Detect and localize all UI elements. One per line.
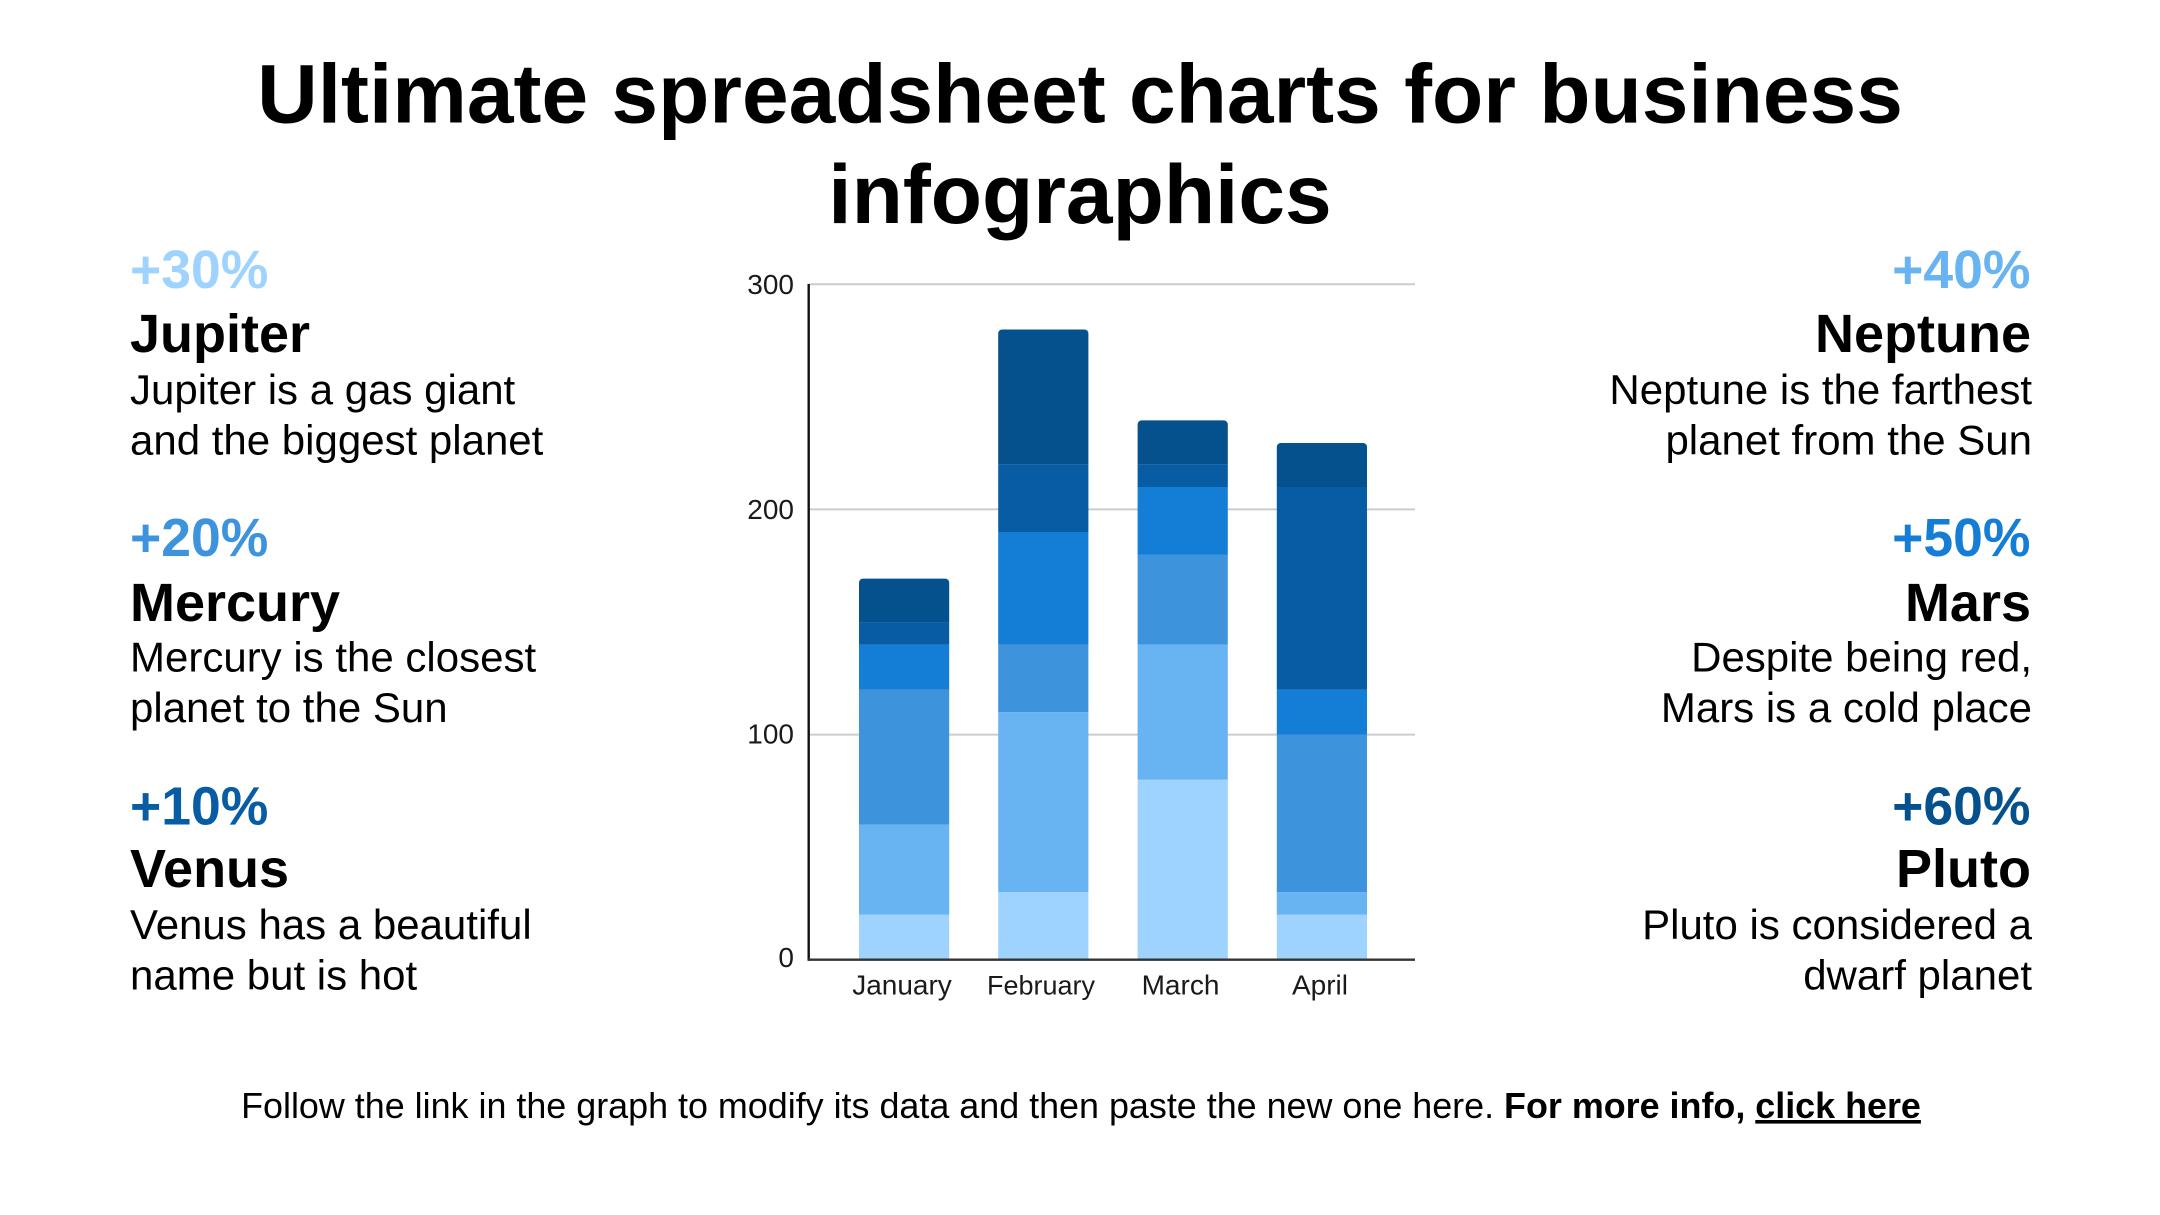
x axis labels: January <box>852 970 952 1001</box>
bar: April <box>1277 443 1367 960</box>
x axis labels: April <box>1292 970 1348 1001</box>
panel: Neptune <box>1609 241 2032 464</box>
y axis labels: 0 <box>778 942 794 973</box>
panel: Pluto: +60% <box>1892 778 2030 837</box>
panel: Jupiter: Jupiter <box>130 304 310 364</box>
panel: Mercury: Mercury <box>130 573 340 633</box>
title: infographics <box>828 147 1332 241</box>
panel: Mercury: Mercury is the closest <box>130 634 536 680</box>
x axis labels: March <box>1142 970 1219 1001</box>
panel: Venus <box>130 778 532 998</box>
panel: Mars: Mars <box>1905 573 2031 633</box>
y axis labels: 100 <box>747 718 794 750</box>
x axis labels <box>852 970 1348 1001</box>
y axis labels: 300 <box>747 269 794 300</box>
panel: Neptune: +40% <box>1892 241 2030 300</box>
bar: February <box>998 330 1088 960</box>
y axis labels: 200 <box>747 494 794 525</box>
bar: January <box>859 579 949 960</box>
panel: Mars: Despite being red, <box>1691 634 2032 680</box>
bar: March <box>1138 420 1228 960</box>
panel: Mercury <box>130 509 536 731</box>
panel: Venus: +10% <box>130 778 268 837</box>
panel: Mars: +50% <box>1892 509 2030 568</box>
panel: Pluto: Pluto is considered a <box>1642 901 2033 948</box>
panel: Neptune: Neptune <box>1815 304 2031 364</box>
panel: Pluto <box>1642 778 2033 998</box>
panel: Pluto: dwarf planet <box>1803 952 2032 998</box>
panel: Venus: Venus <box>130 839 289 899</box>
panel: Neptune: planet from the Sun <box>1665 416 2032 464</box>
panel: Neptune: Neptune is the farthest <box>1609 366 2032 413</box>
panel: Jupiter <box>130 241 544 464</box>
footer note: Follow the link in the graph to modify its data and then paste the new one here. For more info, click here <box>241 1086 1921 1126</box>
panel: Venus: name but is hot <box>130 952 418 998</box>
x axis labels: February <box>987 971 1096 1001</box>
y axis labels <box>747 269 794 973</box>
panel: Jupiter: +30% <box>130 241 268 300</box>
title: Ultimate spreadsheet charts for business <box>257 46 1903 140</box>
panel: Mars: Mars is a cold place <box>1661 684 2032 731</box>
panel: Jupiter: Jupiter is a gas giant <box>130 366 516 413</box>
panel: Venus: Venus has a beautiful <box>130 901 532 948</box>
stacked bar chart <box>747 269 1415 1001</box>
panel: Mercury: +20% <box>130 509 268 568</box>
panel: Mars <box>1661 509 2032 731</box>
title <box>257 46 1903 241</box>
panel: Jupiter: and the biggest planet <box>130 416 544 464</box>
panel: Mercury: planet to the Sun <box>130 684 448 731</box>
panel: Pluto: Pluto <box>1896 839 2031 899</box>
